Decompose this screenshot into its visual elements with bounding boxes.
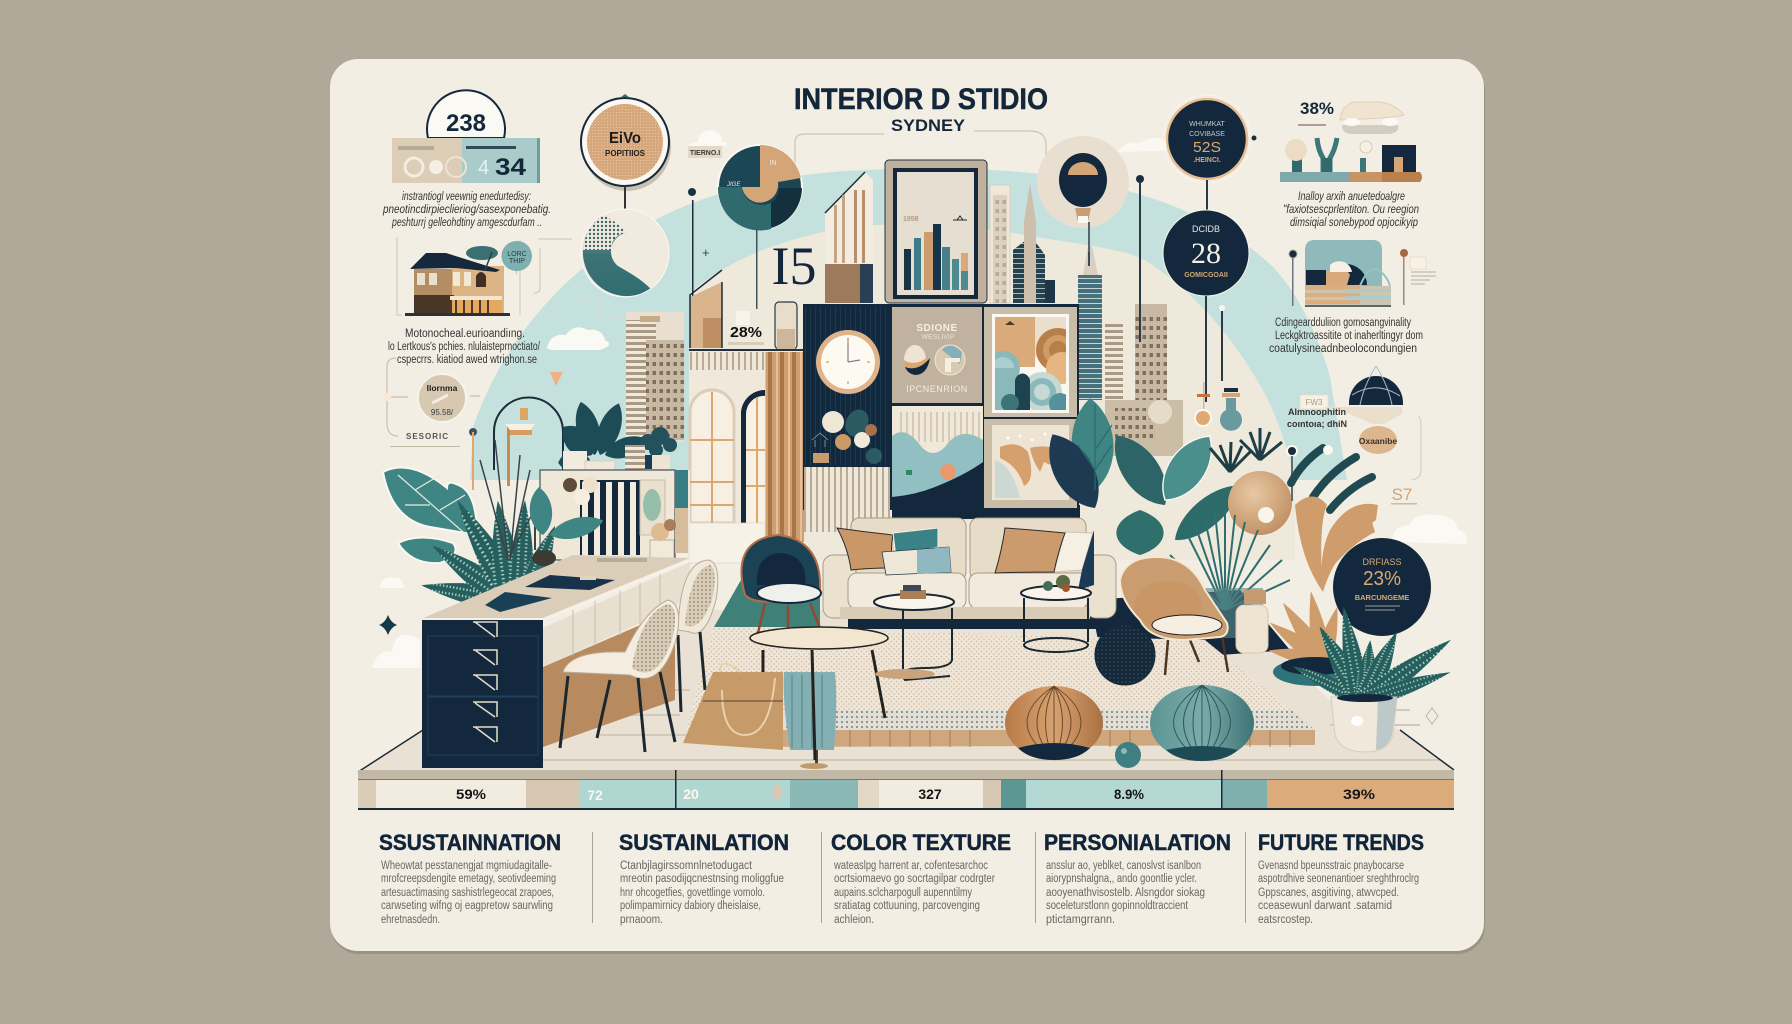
text block: top right: dimsiqial sonebypod opjocikyip bbox=[1290, 217, 1418, 229]
poster: Sdione: SDIONE bbox=[916, 323, 958, 334]
column 2: SUSTAINLATION bbox=[619, 830, 789, 855]
stacked percent bar: 72 bbox=[587, 787, 603, 803]
arch lamp bbox=[469, 398, 563, 490]
desk plant bbox=[528, 486, 606, 580]
teal bowl planter bbox=[1236, 590, 1357, 686]
skyline left bbox=[825, 172, 873, 303]
teal striped vase bbox=[784, 672, 836, 769]
column 5: aspotrdhive seonenantioer sreghthroclrg bbox=[1258, 873, 1419, 885]
teal pouf bbox=[1150, 685, 1254, 761]
column 3: ocrtsiomaevo go socrtagilpar codrgter bbox=[834, 873, 995, 885]
numeral 15: I5 bbox=[772, 236, 816, 296]
stat: 38% and lamp bbox=[1298, 99, 1404, 134]
title bbox=[794, 83, 1048, 165]
column 5: eatsrcostep. bbox=[1258, 914, 1313, 926]
stat circle: DCIDB 28: 28 bbox=[1191, 237, 1221, 270]
cushions bbox=[837, 528, 1094, 590]
balloon marker: THIP bbox=[509, 258, 525, 265]
balloon marker bbox=[501, 241, 532, 275]
stat circle: 52S: 52S bbox=[1193, 139, 1221, 156]
column 4: aiorypnshalgna,, ando goontlie ycler. bbox=[1046, 873, 1197, 885]
navy ball bbox=[1095, 625, 1155, 685]
stat: 38% and lamp: 38% bbox=[1300, 99, 1334, 118]
collage panel bbox=[803, 160, 1080, 532]
navy backdrop behind furniture bbox=[714, 505, 1290, 655]
globe and caption: Oxaanibe bbox=[1359, 436, 1397, 446]
lamp medallion bbox=[1037, 136, 1200, 252]
column 5: Gvenasnd bpeunsstraic pnaybocarse bbox=[1258, 860, 1404, 872]
column 3: wateaslpg harrent ar, cofentesarchoc bbox=[833, 860, 988, 872]
stat circle: peach bbox=[581, 94, 671, 209]
tan building with 28%: 28% bbox=[730, 324, 762, 341]
stat circle: 95.58: SESORIC bbox=[406, 432, 449, 441]
stat circle: 23%: DRFIASS bbox=[1362, 557, 1402, 567]
text block: top right: Inalloy arxih anuetedoalgre bbox=[1298, 191, 1405, 203]
column 2 bbox=[619, 830, 822, 926]
text block: mid left bbox=[388, 328, 541, 366]
column 3: sratiatag cottuuning, parcovenging bbox=[834, 900, 980, 912]
column 4: ansslur ao, yeblket, canoslvst isanlbon bbox=[1046, 860, 1201, 872]
text block: top left: peshturrj gelleohdtiny amgescdurfam .. bbox=[391, 217, 542, 229]
column 4: soceleturstlonn gopinnoldtraccient bbox=[1046, 900, 1189, 912]
text block: top right: "faxiotsescprlentiton. Ou reegion bbox=[1283, 204, 1419, 216]
stat circle: 95.58: 95.58/ bbox=[431, 408, 454, 417]
side table front bbox=[874, 585, 954, 680]
filing cabinet bbox=[422, 620, 543, 768]
palm fern bbox=[1165, 510, 1290, 638]
rug bbox=[686, 627, 1315, 747]
stat circle: 238 bbox=[427, 90, 505, 138]
stat circle: peach: EiVo bbox=[609, 130, 641, 147]
floor platform bbox=[358, 610, 1454, 772]
callout pins left: + bbox=[702, 245, 710, 260]
text block: mid right: Cdingeardduliion gomosangvinality bbox=[1275, 317, 1411, 329]
column 2: mreotin pasodijqcnestnsing moliggfue bbox=[620, 873, 784, 885]
stripes panel bbox=[804, 467, 890, 532]
column 1: Wheowtat pesstanengjat mgmiudagitalle- bbox=[381, 860, 552, 872]
globe and caption bbox=[1287, 366, 1421, 480]
stat circle: 52S: COVIBASE bbox=[1189, 131, 1225, 138]
stat circle: 23% bbox=[1333, 538, 1431, 636]
building front with windows bbox=[685, 349, 805, 563]
potted plant upper bbox=[555, 399, 677, 474]
stat circle: 23%: BARCUNGEME bbox=[1355, 593, 1409, 602]
poster: Sdione bbox=[892, 307, 982, 403]
callout pins left bbox=[575, 188, 710, 318]
column 4: aooyenathvisostelb. Alsngdor siokag bbox=[1046, 887, 1205, 899]
clock panel bbox=[805, 307, 890, 465]
label: thermal: TIERNO.I bbox=[690, 150, 720, 157]
tall grass plant bbox=[480, 440, 540, 560]
halftone sphere bbox=[581, 209, 669, 297]
banner: 34: 4 bbox=[478, 157, 489, 179]
banner: 34 bbox=[392, 138, 540, 183]
poster: Sdione: IPCNENRION bbox=[906, 384, 968, 394]
skyline right towers bbox=[990, 183, 1183, 456]
globe and caption: coıntoıa; dhiN bbox=[1287, 419, 1347, 429]
pie chart: IN bbox=[770, 160, 776, 167]
stat circle: 52S bbox=[1163, 95, 1256, 212]
side table right bbox=[1021, 575, 1091, 652]
poster: Sdione: WESLIVIP bbox=[921, 334, 955, 341]
text block: mid right: Leckgktroassitite ot inaherltingyr dom bbox=[1275, 330, 1423, 342]
snake plant left bbox=[419, 493, 567, 612]
text block: top left bbox=[382, 191, 551, 229]
large monstera left bbox=[383, 468, 478, 563]
title: INTERIOR D STIDIO bbox=[794, 83, 1048, 116]
banner: 34: 34 bbox=[495, 154, 527, 181]
column 3: achleion. bbox=[834, 914, 874, 926]
teal plants right of collage bbox=[1036, 397, 1249, 555]
marker diamond bbox=[379, 372, 1438, 724]
pie chart bbox=[718, 145, 802, 309]
side chair near bbox=[560, 600, 679, 752]
text block: mid right bbox=[1269, 317, 1423, 355]
skyline mid-left tower bbox=[626, 312, 684, 442]
landscape illustration right bbox=[1289, 240, 1436, 307]
text block: mid left: lo Lertkous's pchies. nlulaisteprnoctiato/ bbox=[388, 341, 541, 353]
column 2: Ctanbjlagirssomnlnetodugact bbox=[620, 860, 753, 872]
shopping bag bbox=[683, 664, 783, 750]
stat circle: 95.58 bbox=[383, 358, 480, 447]
column 4 bbox=[1044, 830, 1246, 926]
stat circle: 95.58: Ilornma bbox=[427, 383, 458, 393]
side chair far bbox=[678, 560, 718, 712]
fan plants bbox=[1210, 428, 1282, 472]
shelf with decor bbox=[1280, 138, 1422, 182]
house illustration bbox=[397, 237, 572, 316]
stat circle: 23%: 23% bbox=[1363, 568, 1401, 590]
stacked percent bar: 20 bbox=[683, 786, 699, 802]
column 4: ptictamgrrann. bbox=[1046, 914, 1115, 926]
tan building with 28% bbox=[690, 270, 797, 349]
column 1: carwseting wifng oj eagpretow saurwling bbox=[381, 900, 553, 912]
text block: top right bbox=[1283, 191, 1419, 229]
column 1 bbox=[379, 830, 593, 926]
text block: mid left: cspecrrs. kiatiod awed wtrighon.se bbox=[397, 354, 537, 366]
pins and pendants right bbox=[1136, 175, 1242, 431]
stat circle: 238: 238 bbox=[446, 110, 486, 137]
desk bbox=[423, 555, 690, 747]
column 5: FUTURE TRENDS bbox=[1258, 830, 1424, 855]
column 3: aupains.sclcharpogull aupenntilmy bbox=[834, 887, 972, 899]
sofa bbox=[823, 518, 1116, 619]
column 1: mrofcreepsdengite emetagy, seotivdeeming bbox=[381, 873, 556, 885]
stacked percent bar bbox=[358, 770, 1454, 810]
round table bbox=[750, 627, 888, 760]
globe and caption: Almnoophitin bbox=[1288, 407, 1346, 417]
stat circle: 52S: WHUMKAT bbox=[1189, 121, 1226, 128]
small teal ball bbox=[1115, 742, 1141, 768]
column 3: COLOR TEXTURE bbox=[831, 830, 1011, 855]
column 1: SSUSTAINNATION bbox=[379, 830, 561, 855]
tan chair bbox=[1120, 557, 1228, 675]
poster: map bbox=[984, 419, 1077, 508]
navy chair bbox=[741, 535, 822, 633]
pie chart: JIGE bbox=[726, 182, 741, 188]
text block: top left: instrantiogl veewnig enedurtedisy: bbox=[402, 191, 531, 203]
balloon marker: LORC bbox=[507, 251, 527, 258]
poster: mountains bbox=[984, 307, 1080, 417]
poster: waves bbox=[892, 406, 983, 505]
column 5: Gppscanes, asgitiving, atwvcped. bbox=[1258, 887, 1399, 899]
poster: bar chart: 1958 bbox=[903, 216, 919, 223]
arc backdrop bbox=[470, 168, 1347, 560]
stat circle: DCIDB 28: DCIDB bbox=[1192, 224, 1220, 234]
label: thermal bbox=[688, 130, 727, 158]
column 5: cceasewunl darwant .satamid bbox=[1258, 900, 1392, 912]
stat circle: 52S: .HEINCI. bbox=[1193, 157, 1221, 164]
text block: mid right: coatulysineadnbeolocondungien bbox=[1269, 343, 1417, 355]
stacked percent bar: 327 bbox=[918, 786, 942, 802]
stacked percent bar: 39% bbox=[1343, 786, 1376, 802]
column 2: hnr ohcogetfies, govettlinge vomolo. bbox=[620, 887, 765, 899]
title: SYDNEY bbox=[891, 117, 965, 135]
column 1: ehretnasdedn. bbox=[381, 914, 440, 926]
stat circle: DCIDB 28 bbox=[1163, 210, 1249, 402]
stat circle: DCIDB 28: GOMICGOAII bbox=[1184, 272, 1228, 279]
stacked percent bar: 59% bbox=[456, 786, 487, 802]
column 4: PERSONIALATION bbox=[1044, 830, 1231, 855]
dark curved fronds bbox=[1291, 445, 1372, 510]
column 1: artesuactimasing sashistrlegeocat zrapoes, bbox=[381, 887, 554, 899]
desk back shelf bbox=[540, 470, 688, 560]
text block: top left: pneotincdirpieclieriog/sasexponebatig. bbox=[382, 204, 551, 216]
clouds and minor marks bbox=[372, 327, 1467, 668]
stacked percent bar: 8.9% bbox=[1114, 786, 1145, 802]
card panel bbox=[330, 59, 1485, 954]
text block: mid left: Motonocheal.eurioandiıng. bbox=[405, 328, 525, 340]
column 2: polimpamirnicy dabiory dheislaise, bbox=[620, 900, 761, 912]
globe and caption: FW3 bbox=[1306, 398, 1323, 407]
column 3 bbox=[831, 830, 1036, 926]
snake plant with pot bbox=[1289, 604, 1458, 752]
column 2: prnaoom. bbox=[620, 914, 663, 926]
poster: bar chart bbox=[885, 160, 987, 303]
tan pouf bbox=[1005, 686, 1103, 760]
small stat S7: S7 bbox=[1392, 485, 1412, 504]
stat circle: peach: POPITIIOS bbox=[605, 149, 646, 158]
column 5 bbox=[1258, 830, 1424, 926]
textured sphere bbox=[1228, 446, 1297, 535]
tan foliage bbox=[1264, 496, 1378, 668]
